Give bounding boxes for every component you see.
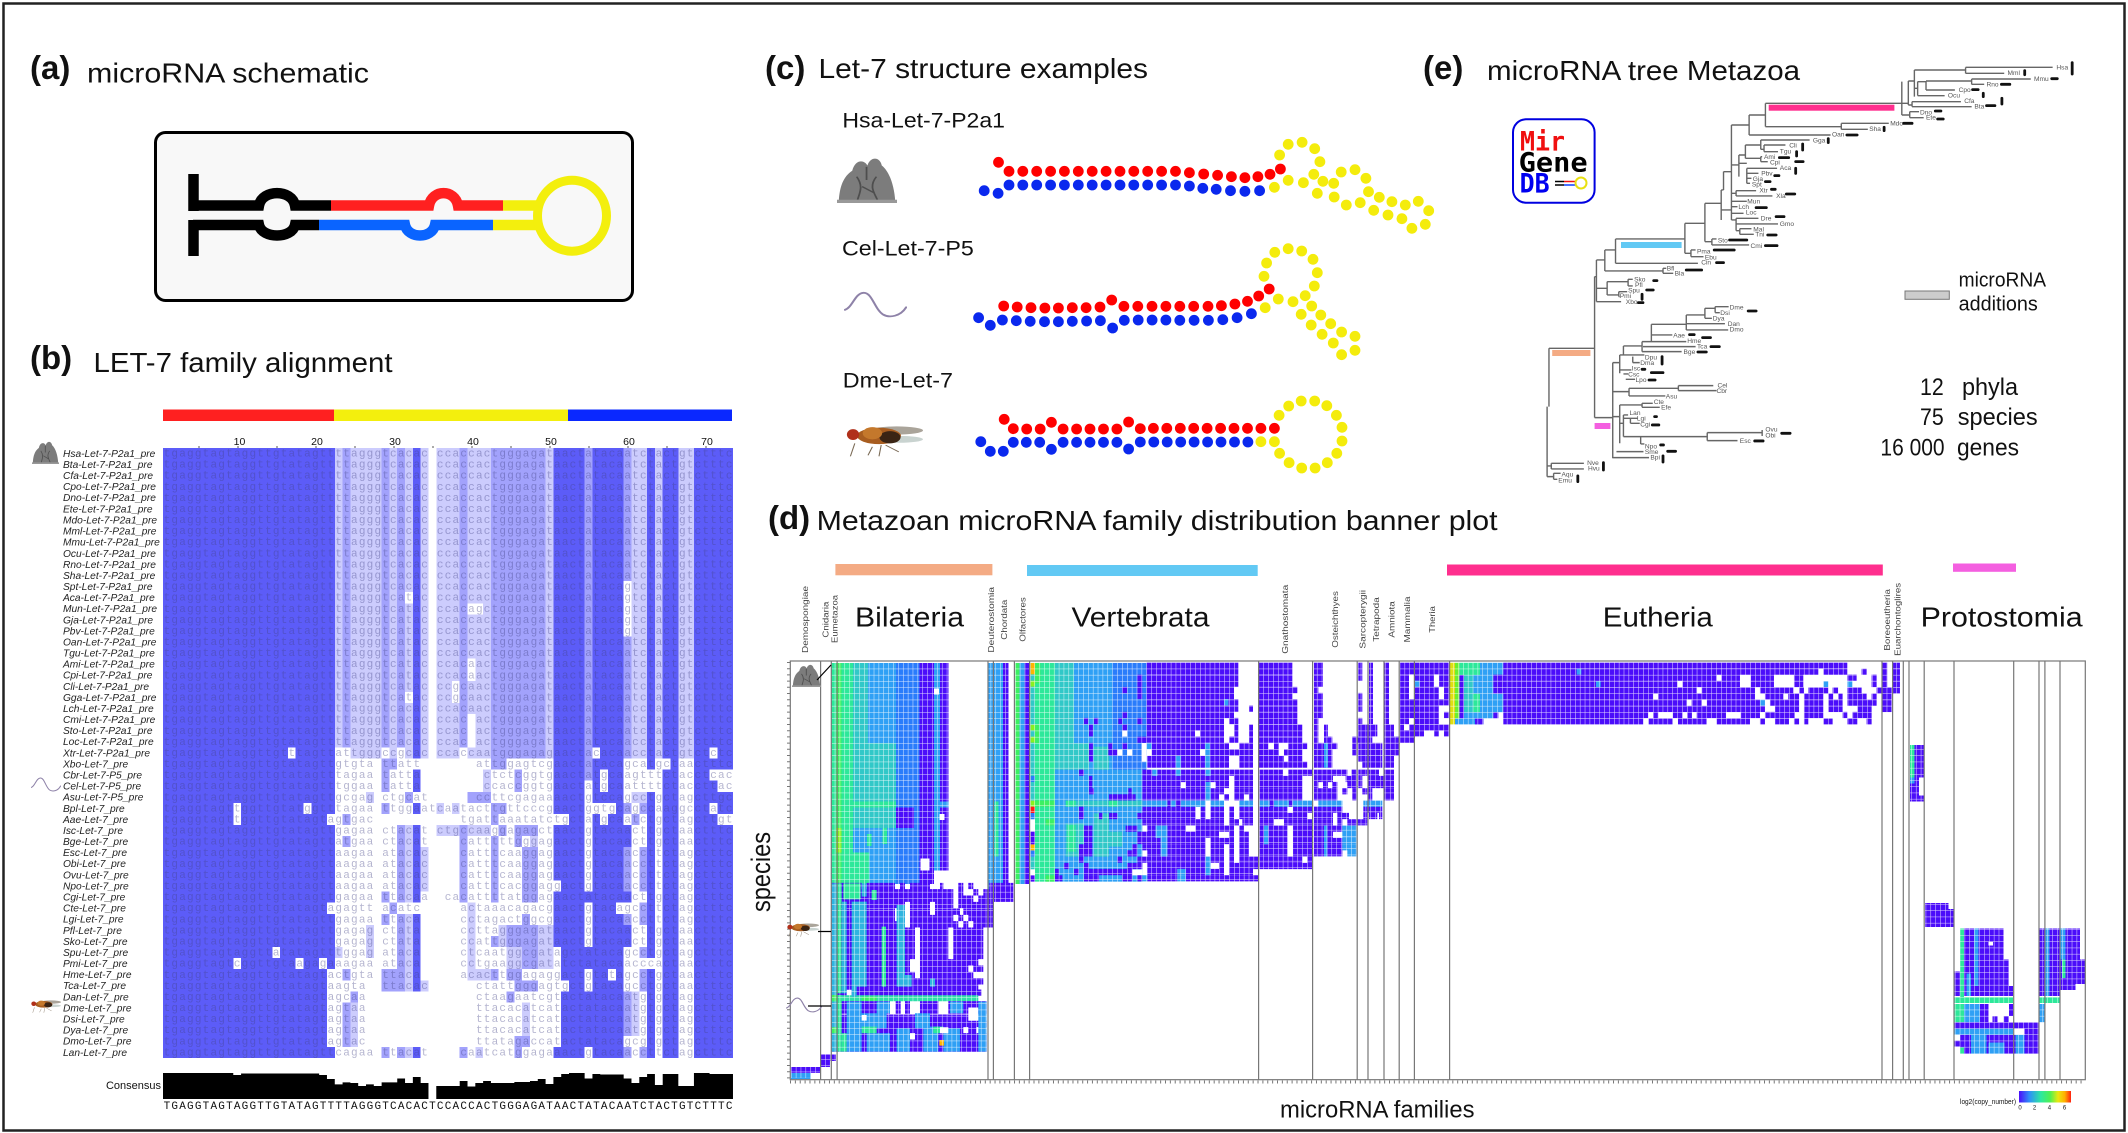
species labels: Pbv: [1761, 171, 1773, 178]
species labels: Hvu: [1588, 466, 1600, 473]
position ruler: 60: [623, 436, 635, 448]
sequence names: Sha-Let-7-P2a1_pre: [63, 571, 156, 582]
species labels: Dmo: [1730, 327, 1744, 334]
summary counts: 12: [1920, 374, 1944, 401]
sequence names: Ovu-Let-7_pre: [63, 870, 129, 882]
hairpin strands: [193, 174, 606, 256]
aligned sequences: tgaggtagtaggttgtatagttttagggtcacac ccac actgggagataactatacaacctactgtctttc: [164, 737, 734, 749]
summary counts: 16 000: [1880, 435, 1945, 462]
Dme hairpin dots: [981, 401, 1342, 468]
species labels: Rno: [1986, 81, 1999, 88]
aligned sequences: tgaggtagtaggttgtatagttttagggtcacac ccaccactgggagataactatacaatctactgtctttc: [164, 570, 734, 582]
large clade labels: [855, 602, 2083, 633]
sequence names: Spu-Let-7_pre: [63, 948, 128, 959]
icon: fly in plot: [787, 924, 819, 937]
species labels: Cfa: [1964, 98, 1975, 105]
aligned sequences: tgaggtagtaggttgtatagtttagaa tatta ctctcggtgaactatgcaagtttctacctcac: [164, 770, 734, 782]
aligned sequences: [164, 448, 734, 1059]
rotated clade labels: Theria: [1428, 605, 1437, 633]
aligned sequences: tgaggtagtaggttatatagtttggag ataca ctcaatggcgatagctatacagcctgctagctttc: [164, 948, 734, 960]
aligned sequences: tgaggtagtaggttgtatagttttagggtcatac ccgcaactgggagataactatacaatctactgtctttc: [164, 681, 734, 693]
sequence names: Aae-Let-7_pre: [62, 815, 128, 826]
heatmap cell grid: [790, 662, 2085, 1078]
schematic box: [156, 132, 632, 300]
sequence names: Gja-Let-7-P2a1_pre: [63, 616, 153, 626]
aligned sequences: tgaggtagtaggttgtatagttttagggtcatac ccacaactgggagataactatacaatctactgtctttc: [164, 670, 734, 682]
aligned sequences: tgaggtagtaggttgtatagttttagggtcacac ccaccactgggagataactatacaatctactgtctttc: [164, 448, 734, 460]
sequence names: Dmo-Let-7_pre: [63, 1036, 132, 1048]
sequence names: Dno-Let-7-P2a1_pre: [63, 493, 156, 504]
species labels: Ami: [1764, 154, 1776, 161]
aligned sequences: tgaggtagtaggttgtatagttttagggtcacac ccac actgggagataactatacaatctactgtctttc: [164, 715, 734, 727]
aligned sequences: tgaggtagtcggttgtaagagaaagaa ataca cctgaaggcgatatctatacaacccactaactttc: [164, 959, 734, 971]
species labels: Spt: [1752, 182, 1762, 189]
y axis label: species: [746, 832, 776, 912]
sequence names: Xtr-Let-7-P2a1_pre: [62, 748, 150, 760]
rotated clade labels: Osteichthyes: [1331, 591, 1340, 648]
species labels: Isc: [1632, 366, 1641, 373]
aligned sequences: tgaggtagtaggttgtatagtactgta ttaca acacttggagaggactgtatagcctgctaactttc: [164, 970, 734, 982]
species labels: Esc: [1740, 438, 1751, 445]
aligned sequences: tgaggtagtaggttgtatagtagtac ttatagaccatactatacagcgtgctagctttc: [164, 1036, 734, 1048]
plot frame and clade dividers: [788, 661, 2085, 1082]
species labels: Xla: [1776, 193, 1786, 200]
species labels: Tni: [1755, 232, 1765, 239]
rotated clade labels: Demospongiae: [801, 585, 810, 653]
species labels: Cgi: [1640, 421, 1651, 428]
species labels: Ocu: [1948, 93, 1960, 100]
position ruler: 70: [701, 436, 713, 448]
species labels: Hsa: [2056, 65, 2068, 72]
species labels: Sha: [1869, 126, 1881, 133]
heading d title: Metazoan microRNA family distribution banner plot: [817, 505, 1498, 536]
species labels: Pfl: [1635, 282, 1643, 289]
sequence names: Xbo-Let-7_pre: [62, 760, 128, 770]
species labels: Lgi: [1637, 416, 1646, 423]
species labels: Ete: [1926, 115, 1936, 122]
species labels: Hme: [1687, 338, 1701, 345]
rotated clade labels: Deuterostomia: [987, 586, 996, 653]
species labels: Tca: [1697, 343, 1708, 350]
species labels: Mmu: [2034, 76, 2049, 83]
species labels: Npo: [1645, 443, 1657, 450]
sequence names: Sko-Let-7_pre: [63, 937, 128, 948]
sequence names: Mun-Let-7-P2a1_pre: [63, 604, 157, 615]
aligned sequences: tgaggtagtaggttgtatagttgagaa ttacaa cacattttatggagaactatacaacttgctagctttc: [164, 892, 734, 904]
species labels: Ebu: [1705, 254, 1717, 261]
aligned sequences: tgaggtagtaggttgtatagtagtaa ttacacatcatactatacaatgtgctagctttc: [164, 1003, 734, 1015]
aligned sequences: tgaggtagtaggttgtatagttcagaa ttacat caatcatggagaaactgtacaaccttctagctttc: [164, 1047, 734, 1059]
species labels: Bta: [1974, 104, 1985, 111]
aligned sequences: tgaggtagtaggttgtatagttttagggtcatac ccgcaactgggagataactatacaatctactgtctttc: [164, 692, 734, 704]
species labels: Pmi: [1620, 293, 1632, 300]
rotated clade labels: Euarchontoglires: [1894, 583, 1902, 656]
heatmap: Vertebrata to Theria, upper rows: [1031, 663, 1450, 770]
sequence names: Dya-Let-7_pre: [63, 1026, 128, 1036]
aligned sequences: tgaggtagtaggttgtttagttattgggccgcac ccaccaatgggagagaactacacaacctactgtctctc: [164, 748, 734, 760]
sequence names: Pbv-Let-7-P2a1_pre: [63, 626, 155, 638]
heatmap: Bilateria, Deuterostomia, Olfactores: [831, 663, 1029, 891]
species labels: Xtr: [1759, 188, 1769, 195]
aligned sequences: tgaggtagtaggttgtatagtagtaa ttacacatcatactatacaatgtgctagctttc: [164, 1014, 734, 1026]
sequence names: Dsi-Let-7_pre: [63, 1014, 125, 1026]
sequence names: Cli-Let-7-P2a1_pre: [63, 682, 149, 693]
rotated clade labels: Tetrapoda: [1372, 597, 1381, 642]
sequence names: Bta-Let-7-P2a1_pre: [63, 460, 153, 471]
species labels: Gga: [1813, 137, 1826, 144]
MirGeneDB logo: DB: [1520, 169, 1550, 200]
species labels: Obi: [1765, 432, 1776, 439]
icon: fly: [31, 1000, 61, 1013]
rotated clade labels: Mammalia: [1403, 596, 1412, 642]
position ruler: 10: [234, 436, 245, 448]
icon: human statue: [32, 442, 59, 464]
species labels: Nve: [1587, 460, 1599, 467]
summary counts: 75: [1920, 404, 1944, 431]
sequence names: Rno-Let-7-P2a1_pre: [63, 560, 156, 571]
position ruler: 20: [311, 436, 323, 448]
large clade labels: Protostomia: [1921, 602, 2083, 633]
sequence names: Hsa-Let-7-P2a1_pre: [63, 449, 156, 460]
species labels: Lch: [1738, 204, 1749, 211]
heading e title: microRNA tree Metazoa: [1487, 55, 1800, 86]
aligned sequences: tgaggtagtaggttgtatagttttagggtcacac ccaccactgggagataactatacaatctactgtctttc: [164, 482, 734, 494]
sequence names: Bge-Let-7_pre: [63, 837, 128, 848]
aligned sequences: tgaggtagtaggttgtatagttttagggtcacac ccacaactgggagataactatacaacctactgtctttc: [164, 704, 734, 716]
aligned sequences: tgaggtagtaggttgtatagttttagggtcatac ccaccactgggagataactatacaatctactgtctttc: [164, 648, 734, 660]
sequence names: Npo-Let-7_pre: [63, 882, 129, 892]
position ruler: [199, 436, 713, 448]
species labels: Efe: [1661, 404, 1671, 411]
sequence names: Asu-Let-7-P5_pre: [62, 792, 144, 804]
sequence names: Dme-Let-7_pre: [63, 1004, 132, 1014]
phylogenetic tree branches: [1547, 67, 2053, 479]
heading e label: (e): [1423, 49, 1463, 86]
aligned sequences: tgaggtagttggttgtatagtagtgac tgattaaatatctgctatgcaatctgctagcttgt: [164, 814, 734, 826]
rotated clade labels: Eumetazoa: [830, 594, 840, 643]
panel d: banner plot: [746, 499, 2085, 1123]
sequence names: Tgu-Let-7-P2a1_pre: [63, 648, 155, 660]
sequence names: Cmi-Let-7-P2a1_pre: [63, 715, 156, 726]
aligned sequences: tgaggtagtaggttgtatagtagagtt acatc actaaacagacgaactgtacagccttctagctttc: [164, 903, 734, 915]
species labels: Bpi: [1650, 455, 1660, 462]
sequence names: Gga-Let-7-P2a1_pre: [63, 693, 157, 704]
species labels: Cmi: [1750, 243, 1763, 250]
species labels: Cpi: [1770, 160, 1780, 167]
sequence names: Cte-Let-7_pre: [63, 904, 126, 914]
species labels: Tgu: [1780, 148, 1791, 155]
aligned sequences: tgaggtagtaggttgtatagttgcgag ctgcat ccttcgagaaaactgtccagcctgctagcttgc: [164, 792, 734, 804]
aligned sequences: tgaggtagtaggttgtatagttaagaa atacac catttcacggaggactgtacaaccttctagctttc: [164, 881, 734, 893]
aligned sequences: tgaggtagtaggttgtatagttttagggtcacac ccaccactgggagataactatacaatctactgtctttc: [164, 559, 734, 571]
aligned sequences: tgaggtagtaggttgtatagttttagggtcacac ccaccactgggagataactatacaatctactgtctttc: [164, 504, 734, 516]
aligned sequences: tgaggtagtaggttgtatagttttagggtcatac ccaccactgggagataactatacagtctactgtctttc: [164, 615, 734, 627]
aligned sequences: tgaggtagtaggttgtatagttaagaa atacac catttcaaggagaactgtacaaccttctagctttc: [164, 870, 734, 882]
rotated clade labels: Chordata: [1000, 599, 1009, 640]
species silhouettes: [1578, 63, 2072, 482]
aligned sequences: tgaggtagtaggttgtatagttgagag ctata ccattgggagataactgtacaacttgctaactttc: [164, 936, 734, 948]
species labels: Cpo: [1959, 87, 1971, 94]
alignment shading: [163, 448, 733, 1058]
species labels: Dsi: [1720, 310, 1730, 317]
sequence names: Ete-Let-7-P2a1_pre: [63, 504, 153, 516]
species labels: Gmo: [1780, 221, 1794, 228]
species labels: Sto: [1718, 237, 1728, 244]
species labels: Lpo: [1636, 377, 1647, 384]
species labels: Dno: [1920, 109, 1932, 116]
sequence names: Spt-Let-7-P2a1_pre: [63, 582, 153, 593]
species labels: Loc: [1746, 210, 1757, 217]
aligned sequences: tgaggtagtaggttgtatagttaagaa atacac catttcaaggagaactgtacaaccttctagctttc: [164, 859, 734, 871]
position ruler: 50: [545, 436, 557, 448]
sequence names: Mmu-Let-7-P2a1_pre: [63, 538, 160, 548]
aligned sequences: tgaggtagtaggttgtatagttttagggtcatac ccacagctgggagataactatacagtctactgtctttc: [164, 604, 734, 616]
summary counts: [1880, 374, 2038, 462]
species labels: Pma: [1697, 249, 1711, 256]
heatmap: Eutheria rows: [1450, 662, 1900, 724]
species labels: Cte: [1654, 399, 1664, 406]
MirGeneDB logo: Gene: [1519, 148, 1588, 179]
aligned sequences: tgaggtagtaggttgtatagttgagaa ttaca cctagactggcgaactgtacaaccttctagctttc: [164, 914, 734, 926]
aligned sequences: tgaggtagtaggttgtatagttatgaa ctacat catttttgggagaactgtacaacttgctaactttc: [164, 837, 734, 849]
icon: statue in plot: [792, 665, 821, 687]
species labels: Sme: [1645, 449, 1659, 456]
heatmap: Protostomia clades: [1910, 745, 2085, 1054]
species labels: Dre: [1761, 215, 1772, 222]
aligned sequences: tgaggtagtaggttgtatagtaagta ttacac ctattgggagtgctgtacagcctgctaactttc: [164, 981, 734, 993]
sequence names: Tca-Let-7_pre: [63, 981, 126, 992]
species name Dme: Dme-Let-7: [843, 369, 953, 392]
MirGeneDB logo: Mir: [1520, 127, 1565, 158]
heading c title: Let-7 structure examples: [818, 53, 1148, 84]
species labels: Bfl: [1667, 265, 1675, 272]
aligned sequences: tgaggtagtaggttgtatagttttagggtcatac ccaccactgggagataactatacagtctactgtctttc: [164, 593, 734, 605]
species labels: Oan: [1832, 132, 1845, 139]
aligned sequences: tgaggtagtaggttgtatagttttagggtcacac ccaccactgggagataactatacaatctactgtctttc: [164, 537, 734, 549]
sequence names: Cpi-Let-7-P2a1_pre: [63, 670, 153, 682]
sequence names: Ocu-Let-7-P2a1_pre: [63, 549, 156, 560]
summary counts: genes: [1957, 435, 2019, 462]
aligned sequences: tgaggtagtaggttgtatagttttagggtcacac ccaccactgggagataactatacaatctactgtctttc: [164, 548, 734, 560]
colour legend: 2: [2033, 1106, 2037, 1112]
heading b label: (b): [30, 339, 72, 376]
region colour bar: [163, 410, 732, 421]
sequence names: Mml-Let-7-P2a1_pre: [63, 526, 157, 538]
icon: statue: [837, 159, 897, 203]
aligned sequences: tgaggtagttggttgtatggtttagaa ttggaatcaatacttgttcccgaactggtgcagccaaggcctatc: [164, 803, 734, 815]
aligned sequences: tgaggtagtaggttgtatagttttagggtcacac ccaccactgggagataactatacaatctactgtctttc: [164, 493, 734, 505]
aligned sequences: tgaggtagtaggttgtatagttttagggtcacac ccac actgggagataactatacaatctactgtctttc: [164, 726, 734, 738]
species labels: Mal: [1753, 226, 1764, 233]
species labels: Asu: [1666, 393, 1677, 400]
colour legend: 6: [2063, 1106, 2067, 1112]
species name Cel: Cel-Let-7-P5: [842, 238, 974, 261]
icon: worm: [31, 778, 61, 791]
additions legend: additions: [1959, 294, 2038, 316]
sequence names: Cbr-Let-7-P5_pre: [63, 770, 142, 782]
sequence names: Lan-Let-7_pre: [63, 1048, 127, 1059]
species labels: Dme: [1730, 304, 1744, 311]
sequence names: Aca-Let-7-P2a1_pre: [62, 593, 155, 604]
heading c label: (c): [765, 49, 805, 86]
sequence names: Loc-Let-7-P2a1_pre: [63, 737, 154, 748]
species labels: Csc: [1628, 371, 1640, 378]
species labels: Cli: [1789, 143, 1797, 150]
species labels: Dya: [1713, 316, 1725, 323]
summary counts: species: [1958, 404, 2038, 431]
species labels: Dpu: [1645, 354, 1657, 361]
rotated clade labels: Amniota: [1388, 601, 1397, 638]
sequence names: Esc-Let-7_pre: [63, 848, 127, 859]
aligned sequences: tgaggtagtaggttgtatagttttagggtcatac ccacaactgggagataactatacaatctactgtctttc: [164, 659, 734, 671]
rotated clade labels: Boreoeutheria: [1883, 588, 1892, 651]
aligned sequences: tgaggtagtaggttgtatagttgtgta ttatt attggagtcgaactatacagcatgctaactttc: [164, 759, 734, 771]
sequence names: Mdo-Let-7-P2a1_pre: [63, 516, 157, 526]
aligned sequences: tgaggtagtaggttgtatagttgagaa ctacat ctgccaaggagagctaactgtacaacttgctaactttc: [164, 826, 734, 838]
species labels: Aae: [1673, 332, 1685, 339]
aligned sequences: tgaggtagtaggttgtatagttttagggtcacac ccaccactgggagataactatacaatctactgtctttc: [164, 460, 734, 472]
species labels: Dan: [1728, 321, 1740, 328]
icon: worm in plot: [786, 998, 822, 1012]
sequence names: Dan-Let-7_pre: [63, 992, 129, 1004]
consensus bars: [163, 1073, 733, 1099]
colour legend: 0: [2018, 1106, 2022, 1112]
sequence names: Bpl-Let-7_pre: [63, 804, 125, 815]
species labels: Bla: [1675, 271, 1684, 278]
heading b title: LET-7 family alignment: [94, 347, 393, 378]
sequence names: Cgi-Let-7_pre: [63, 892, 126, 904]
heatmap: basal clades: [791, 1055, 836, 1079]
species labels: Emu: [1558, 477, 1572, 484]
Hsa hairpin dots: [984, 142, 1429, 228]
aligned sequences: tgaggtagtaggttgtatagttttagggtcatac ccaccactgggagataactatacaatctactgtctttc: [164, 637, 734, 649]
icon: fly: [847, 426, 923, 456]
aligned sequences: tgaggtagtaggttgtatagtagtaa ttacacatcatactatacaatgtgctagctttc: [164, 1025, 734, 1037]
aligned sequences: tgaggtagtaggttgtatagttttagggtcacac ccaccactgggagataactatacaatctactgtctttc: [164, 526, 734, 538]
colour legend: log2(copy_number): [1960, 1097, 2016, 1106]
rotated clade labels: Gnathostomata: [1281, 584, 1290, 654]
aligned sequences: tgaggtagtaggttgtatagttttagggtcacac ccaccactgggagataactatacagtctactgtctttc: [164, 582, 734, 594]
heading a label: (a): [30, 49, 70, 86]
sequence names: Isc-Let-7_pre: [63, 826, 123, 837]
heading a title: microRNA schematic: [87, 58, 369, 88]
species labels: Gja: [1753, 176, 1763, 183]
species labels: Lan: [1630, 410, 1641, 417]
sequence names: Pmi-Let-7_pre: [63, 959, 128, 970]
icon: worm: [845, 293, 906, 316]
species labels: Cbr: [1716, 388, 1728, 395]
pointer lines: [808, 665, 831, 1006]
heatmap: Vertebrata to Amniota, lower rows: [1031, 770, 1394, 882]
Cel hairpin dots: [979, 249, 1355, 355]
rotated clade labels: Cnidaria: [822, 601, 830, 638]
species labels: Aca: [1780, 165, 1791, 172]
additions legend: [1905, 270, 2047, 316]
sequence names: [62, 449, 160, 1059]
panel a: microRNA schematic: [30, 49, 632, 300]
aligned sequences: tgaggtagtaggttgtatagtagcaa ctaagaatcgtactatacaatgtgctagctttc: [164, 992, 734, 1004]
summary counts: phyla: [1962, 374, 2019, 401]
sequence names: Lch-Let-7-P2a1_pre: [63, 704, 154, 715]
species labels: Ovu: [1765, 427, 1778, 434]
aligned sequences: tgaggtagtaggttgtatagttgagag ctata ccttagggagataactgtacaacttgctaactttc: [164, 925, 734, 937]
aligned sequences: tgaggtagtaggttgtatagttttagggtcacac ccaccactgggagataactatacaatctactgtctttc: [164, 515, 734, 527]
additions legend: microRNA: [1959, 270, 2047, 292]
sequence names: Cpo-Let-7-P2a1_pre: [63, 482, 156, 493]
clade colour bars: [835, 564, 2016, 576]
panel e: microRNA tree: [1423, 49, 2072, 484]
species labels: Bge: [1684, 349, 1696, 356]
sequence names: Pfl-Let-7_pre: [63, 926, 122, 937]
colour legend: 4: [2048, 1106, 2052, 1112]
sequence names: Oan-Let-7-P2a1_pre: [63, 638, 157, 648]
species labels: Cin: [1701, 260, 1711, 267]
sequence names: Hme-Let-7_pre: [63, 970, 132, 981]
position ruler: 40: [467, 436, 479, 448]
species labels: Spu: [1628, 288, 1640, 295]
large clade labels: Eutheria: [1603, 602, 1713, 633]
consensus sequence: TGAGGTAGTAGGTTGTATAGTTTTAGGGTCACACTCCACCACTGGGAGATAACTATACAATCTACTGTCTTTC: [164, 1101, 734, 1113]
consensus label: Consensus: [106, 1080, 161, 1092]
panel b: LET-7 family alignment: [30, 339, 734, 1113]
sequence names: Sto-Let-7-P2a1_pre: [63, 726, 153, 737]
aligned sequences: tgaggtagtaggttgtatagtttggaa tatta ccaccggtgaactatgcaattttctaccttac: [164, 781, 734, 793]
tree clade bars: [1552, 105, 1894, 429]
sequence names: Cel-Let-7-P5_pre: [63, 782, 141, 792]
species labels: Cel: [1718, 382, 1728, 389]
species labels: Mun: [1747, 199, 1760, 206]
position ruler: 30: [389, 436, 401, 448]
sequence names: Obi-Let-7_pre: [63, 859, 126, 870]
aligned sequences: tgaggtagtaggttgtatagttaagaa atacac catttcaaggagaactgtacaaccttctagctttc: [164, 848, 734, 860]
aligned sequences: tgaggtagtaggttgtatagttttagggtcatac ccaccactgggagataactatacagtctactgtctttc: [164, 626, 734, 638]
x axis label: microRNA families: [1280, 1096, 1474, 1123]
species labels: Mdo: [1890, 120, 1903, 127]
MirGeneDB logo: [1513, 119, 1595, 203]
sequence names: Lgi-Let-7_pre: [63, 914, 124, 926]
species labels: Sko: [1634, 277, 1646, 284]
species name Hsa: Hsa-Let-7-P2a1: [842, 109, 1005, 132]
rotated clade labels: [801, 583, 1902, 656]
rotated clade labels: Sarcopterygii: [1359, 590, 1368, 649]
panel c: Let-7 structure examples: [765, 49, 1429, 468]
species labels: Xbo: [1626, 299, 1638, 306]
species labels: [1558, 65, 2068, 484]
species labels: Aqu: [1562, 472, 1574, 479]
sequence names: Cfa-Let-7-P2a1_pre: [63, 471, 153, 482]
colour legend: [1960, 1091, 2071, 1112]
large clade labels: Vertebrata: [1072, 602, 1210, 633]
species labels: Dma: [1640, 360, 1654, 367]
aligned sequences: tgaggtagtaggttgtatagttttagggtcacac ccaccactgggagataactatacaatctactgtctttc: [164, 471, 734, 483]
large clade labels: Bilateria: [855, 602, 964, 633]
heading d label: (d): [768, 499, 810, 536]
heatmap: lower left clades: [832, 883, 1013, 1052]
species labels: Mml: [2008, 70, 2020, 77]
sequence names: Ami-Let-7-P2a1_pre: [62, 660, 155, 670]
rotated clade labels: Olfactores: [1018, 597, 1027, 642]
